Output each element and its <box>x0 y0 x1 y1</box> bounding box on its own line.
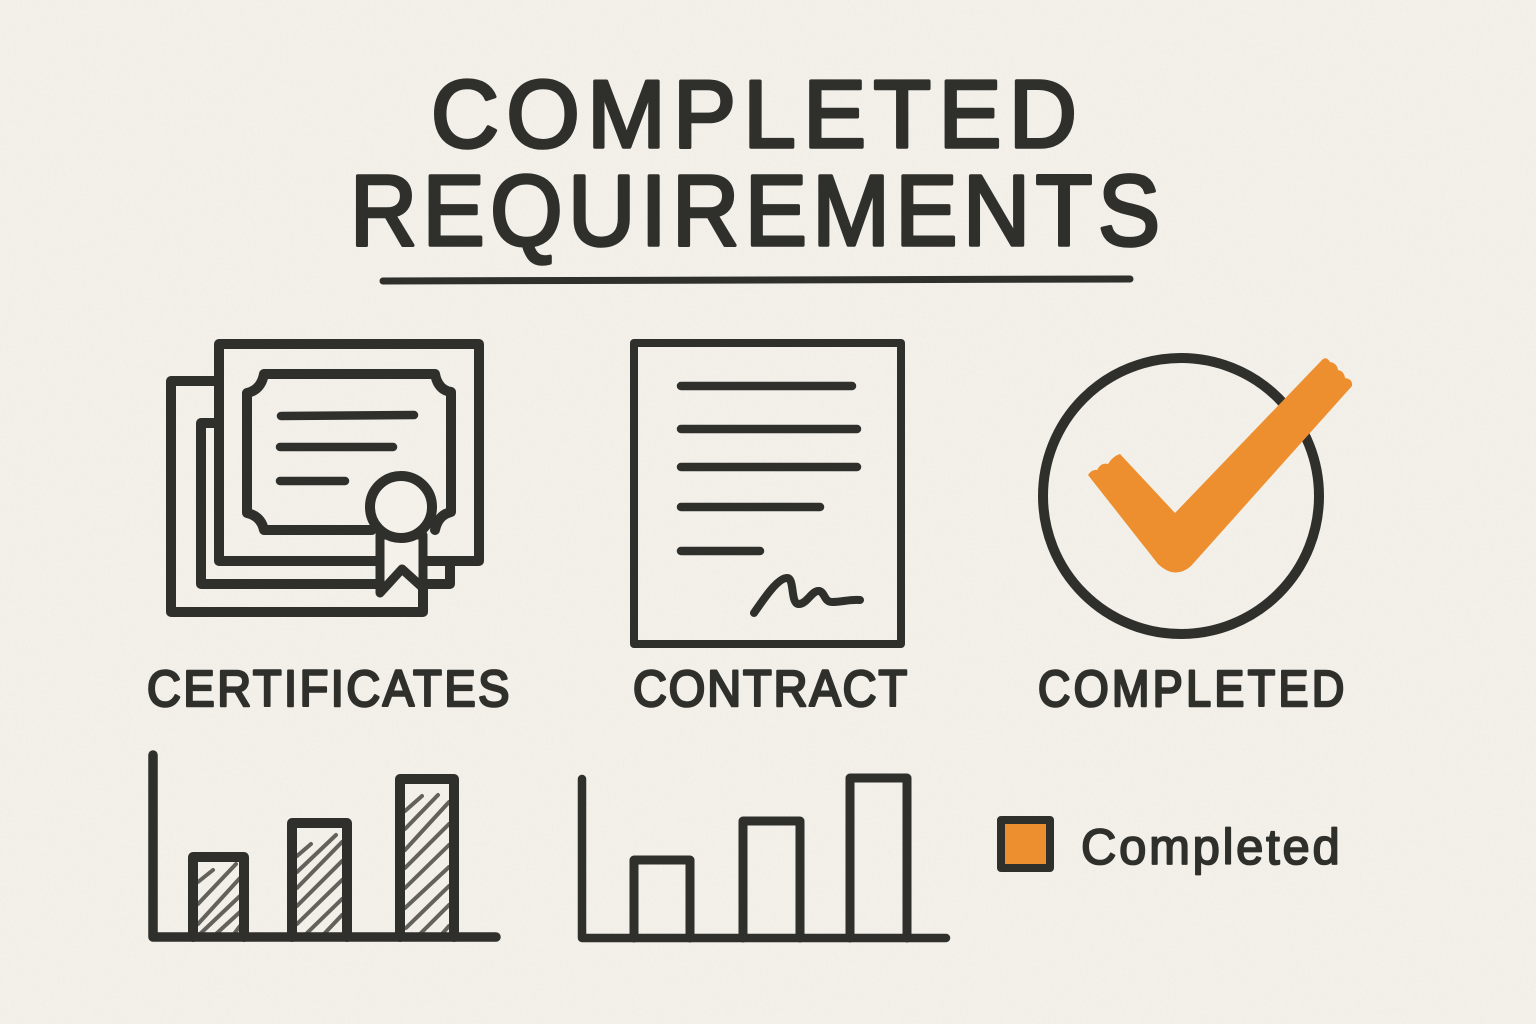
bars <box>634 778 907 938</box>
orange check <box>1088 358 1352 573</box>
bars <box>193 779 454 937</box>
legend label: Completed <box>1081 820 1340 875</box>
bar chart: outline <box>582 778 946 938</box>
label: certificates: CERTIFICATES <box>147 661 509 717</box>
inner certificate border <box>247 374 451 530</box>
title <box>350 61 1160 267</box>
contract page <box>634 343 901 644</box>
title: REQUIREMENTS <box>350 156 1160 267</box>
label: completed: COMPLETED <box>1038 661 1344 718</box>
contract text lines <box>681 386 857 551</box>
back certificate sheet <box>171 381 423 612</box>
icon: completed checkmark <box>1043 358 1352 634</box>
icon: contract <box>634 343 901 644</box>
legend swatch <box>1001 820 1050 868</box>
circle <box>1043 358 1319 634</box>
certificate text lines <box>280 415 414 481</box>
legend <box>1001 820 1340 875</box>
title: COMPLETED <box>431 61 1077 168</box>
axes <box>582 779 946 938</box>
icon: certificates <box>171 344 479 612</box>
bar hatching <box>198 795 449 934</box>
title underline <box>383 279 1130 281</box>
front certificate sheet <box>219 344 479 561</box>
signature <box>754 578 860 613</box>
axes <box>153 755 496 937</box>
label: contract: CONTRACT <box>633 661 907 717</box>
seal and ribbon <box>370 476 432 593</box>
bar chart: hatched <box>153 755 496 937</box>
middle certificate sheet <box>201 423 450 584</box>
